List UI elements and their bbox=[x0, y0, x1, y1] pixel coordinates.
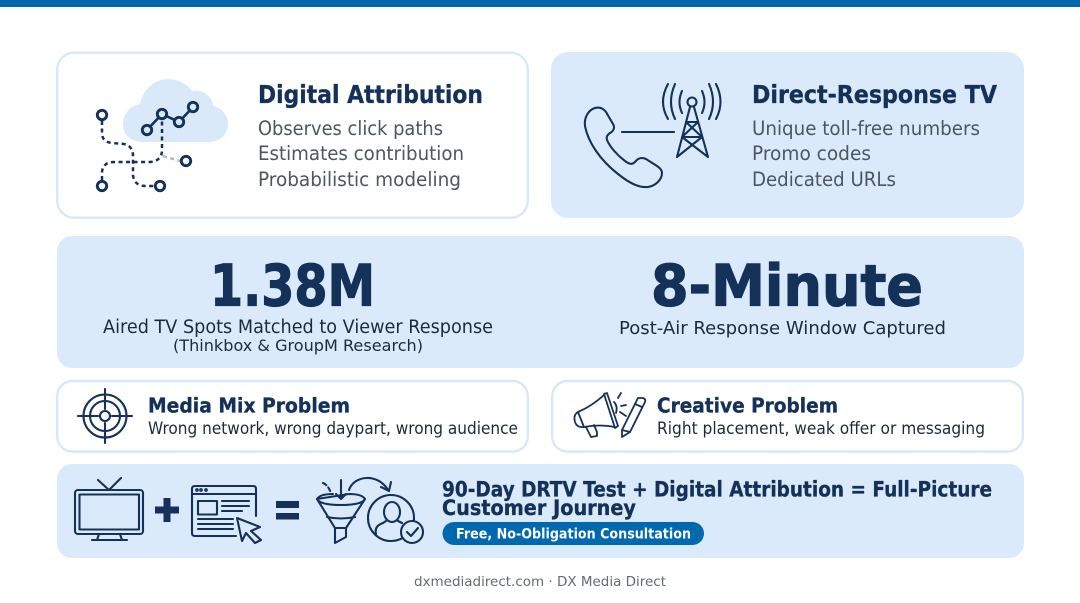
icon: equals bbox=[276, 501, 299, 520]
stat: 8-minute bbox=[619, 254, 946, 339]
icon: target bbox=[78, 389, 132, 443]
text block: drtv list: Unique toll-free numbers bbox=[752, 117, 980, 140]
button: consultation pill bbox=[442, 522, 704, 545]
stat: 1.38M bbox=[103, 254, 493, 355]
text block: attribution list: Observes click paths bbox=[258, 117, 443, 140]
text block: attribution list: Probabilistic modeling bbox=[258, 168, 461, 191]
heading: creative problem: Creative Problem bbox=[657, 394, 838, 418]
icon: television bbox=[75, 478, 143, 540]
stat: 1.38M: 1.38M bbox=[210, 254, 375, 320]
stat: 1.38M: Aired TV Spots Matched to Viewer Response bbox=[103, 317, 493, 338]
stat: 1.38M: (Thinkbox & GroupM Research) bbox=[173, 336, 423, 355]
icon: cloud network bbox=[97, 79, 228, 191]
text: media mix description: Wrong network, wrong daypart, wrong audience bbox=[148, 419, 518, 438]
panel: creative problem bbox=[552, 381, 1023, 452]
icon: plus bbox=[155, 498, 179, 522]
text: creative description: Right placement, weak offer or messaging bbox=[657, 419, 985, 438]
icon: funnel and customer bbox=[317, 478, 423, 543]
panel: digital attribution bbox=[57, 53, 528, 218]
headline: Customer Journey bbox=[442, 496, 636, 520]
heading: media mix problem: Media Mix Problem bbox=[148, 394, 350, 418]
text block: drtv list: Promo codes bbox=[752, 142, 871, 165]
button: consultation pill: Free, No-Obligation Consultation bbox=[456, 526, 691, 542]
top bar bbox=[0, 0, 1080, 7]
stat: 8-minute: Post-Air Response Window Captured bbox=[619, 318, 946, 339]
text block: attribution list: Estimates contribution bbox=[258, 142, 464, 165]
text block: drtv list bbox=[752, 117, 980, 191]
panel: media mix problem bbox=[57, 381, 528, 452]
icon: megaphone and pencil bbox=[574, 393, 645, 437]
footer: dxmediadirect.com · DX Media Direct bbox=[414, 574, 666, 590]
text block: attribution list bbox=[258, 117, 464, 191]
panel: call to action bbox=[57, 464, 1024, 558]
stat: 8-minute: 8-Minute bbox=[651, 254, 923, 320]
text block: drtv list: Dedicated URLs bbox=[752, 168, 896, 191]
headline: 90-Day DRTV Test + Digital Attribution = Full-Picture bbox=[442, 478, 992, 502]
icon: phone and tower bbox=[585, 84, 720, 187]
panel: key statistics bbox=[57, 236, 1024, 368]
icon: browser with cursor bbox=[192, 486, 261, 543]
panel: direct-response tv bbox=[551, 52, 1024, 218]
heading: digital attribution: Digital Attribution bbox=[258, 80, 483, 109]
headline bbox=[442, 478, 992, 520]
heading: direct-response tv: Direct-Response TV bbox=[752, 80, 998, 109]
